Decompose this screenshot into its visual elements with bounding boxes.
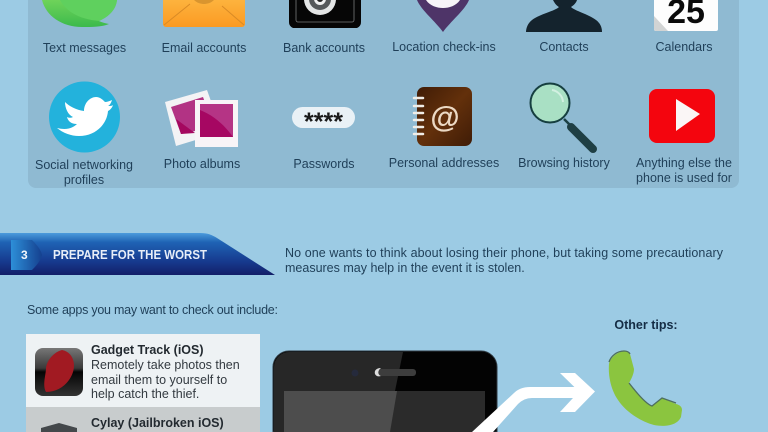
section banner: prepare for the worst: 3 <box>21 248 28 262</box>
icon: address book: @ <box>430 101 460 134</box>
intro text: measures may help in the event it is stolen. <box>285 261 525 275</box>
app: gadget track description: Remotely take photos then <box>91 358 240 372</box>
label: social networking profiles: Social networking <box>35 158 133 172</box>
icon: password field <box>292 107 355 136</box>
apps heading: Some apps you may want to check out include: <box>27 303 278 317</box>
label: anything else the phone is used for: phone is used for <box>636 171 732 185</box>
label: anything else the phone is used for <box>636 156 732 185</box>
heading: other tips: Other tips: <box>614 318 678 332</box>
icon: video play button <box>649 89 715 143</box>
icon: address book <box>414 87 472 146</box>
icon: twitter bird <box>49 82 120 152</box>
label: photo albums: Photo albums <box>164 157 240 171</box>
icon: cylay shield <box>41 423 77 432</box>
label: social networking profiles: profiles <box>64 173 104 187</box>
label: anything else the phone is used for: Anything else the <box>636 156 732 170</box>
section banner: prepare for the worst <box>0 233 275 275</box>
banner title: PREPARE FOR THE WORST <box>53 248 207 262</box>
label: bank accounts: Bank accounts <box>283 41 365 55</box>
panel: app list <box>26 334 260 432</box>
app: gadget track description <box>91 343 240 401</box>
arrow: white to other tips <box>472 373 595 432</box>
panel: what the phone holds <box>28 0 739 188</box>
label: text messages: Text messages <box>43 41 126 55</box>
label: location check-ins: Location check-ins <box>392 40 496 54</box>
label: passwords: Passwords <box>293 157 355 171</box>
icon: bank safe <box>289 0 361 28</box>
label: browsing history: Browsing history <box>518 156 611 170</box>
icon: text message bubble <box>42 0 117 27</box>
icon: gadget track <box>35 348 83 396</box>
icon: calendar <box>654 0 718 31</box>
icon: green telephone handset <box>609 351 682 426</box>
app: gadget track description: email them to yourself to <box>91 373 227 387</box>
intro text: No one wants to think about losing their phone, but taking some precautionary <box>285 246 724 260</box>
label: contacts: Contacts <box>539 40 589 54</box>
icon: photo albums <box>165 90 238 147</box>
label: personal addresses: Personal addresses <box>389 156 499 170</box>
icon: envelope <box>163 0 245 27</box>
intro text <box>285 246 724 275</box>
app: gadget track description: Gadget Track (iOS) <box>91 343 204 357</box>
illustration: smartphone <box>273 351 497 432</box>
label: calendars: Calendars <box>656 40 712 54</box>
app: gadget track description: help catch the thief. <box>91 387 199 401</box>
icon: contact silhouette <box>526 0 602 32</box>
icon: location pin <box>417 0 469 32</box>
icon: password field: **** <box>304 108 343 136</box>
icon: magnifying glass <box>530 84 593 149</box>
label: email accounts: Email accounts <box>162 41 246 55</box>
label: social networking profiles <box>35 158 133 187</box>
number badge <box>11 240 42 270</box>
app: cylay title: Cylay (Jailbroken iOS) <box>91 416 224 430</box>
